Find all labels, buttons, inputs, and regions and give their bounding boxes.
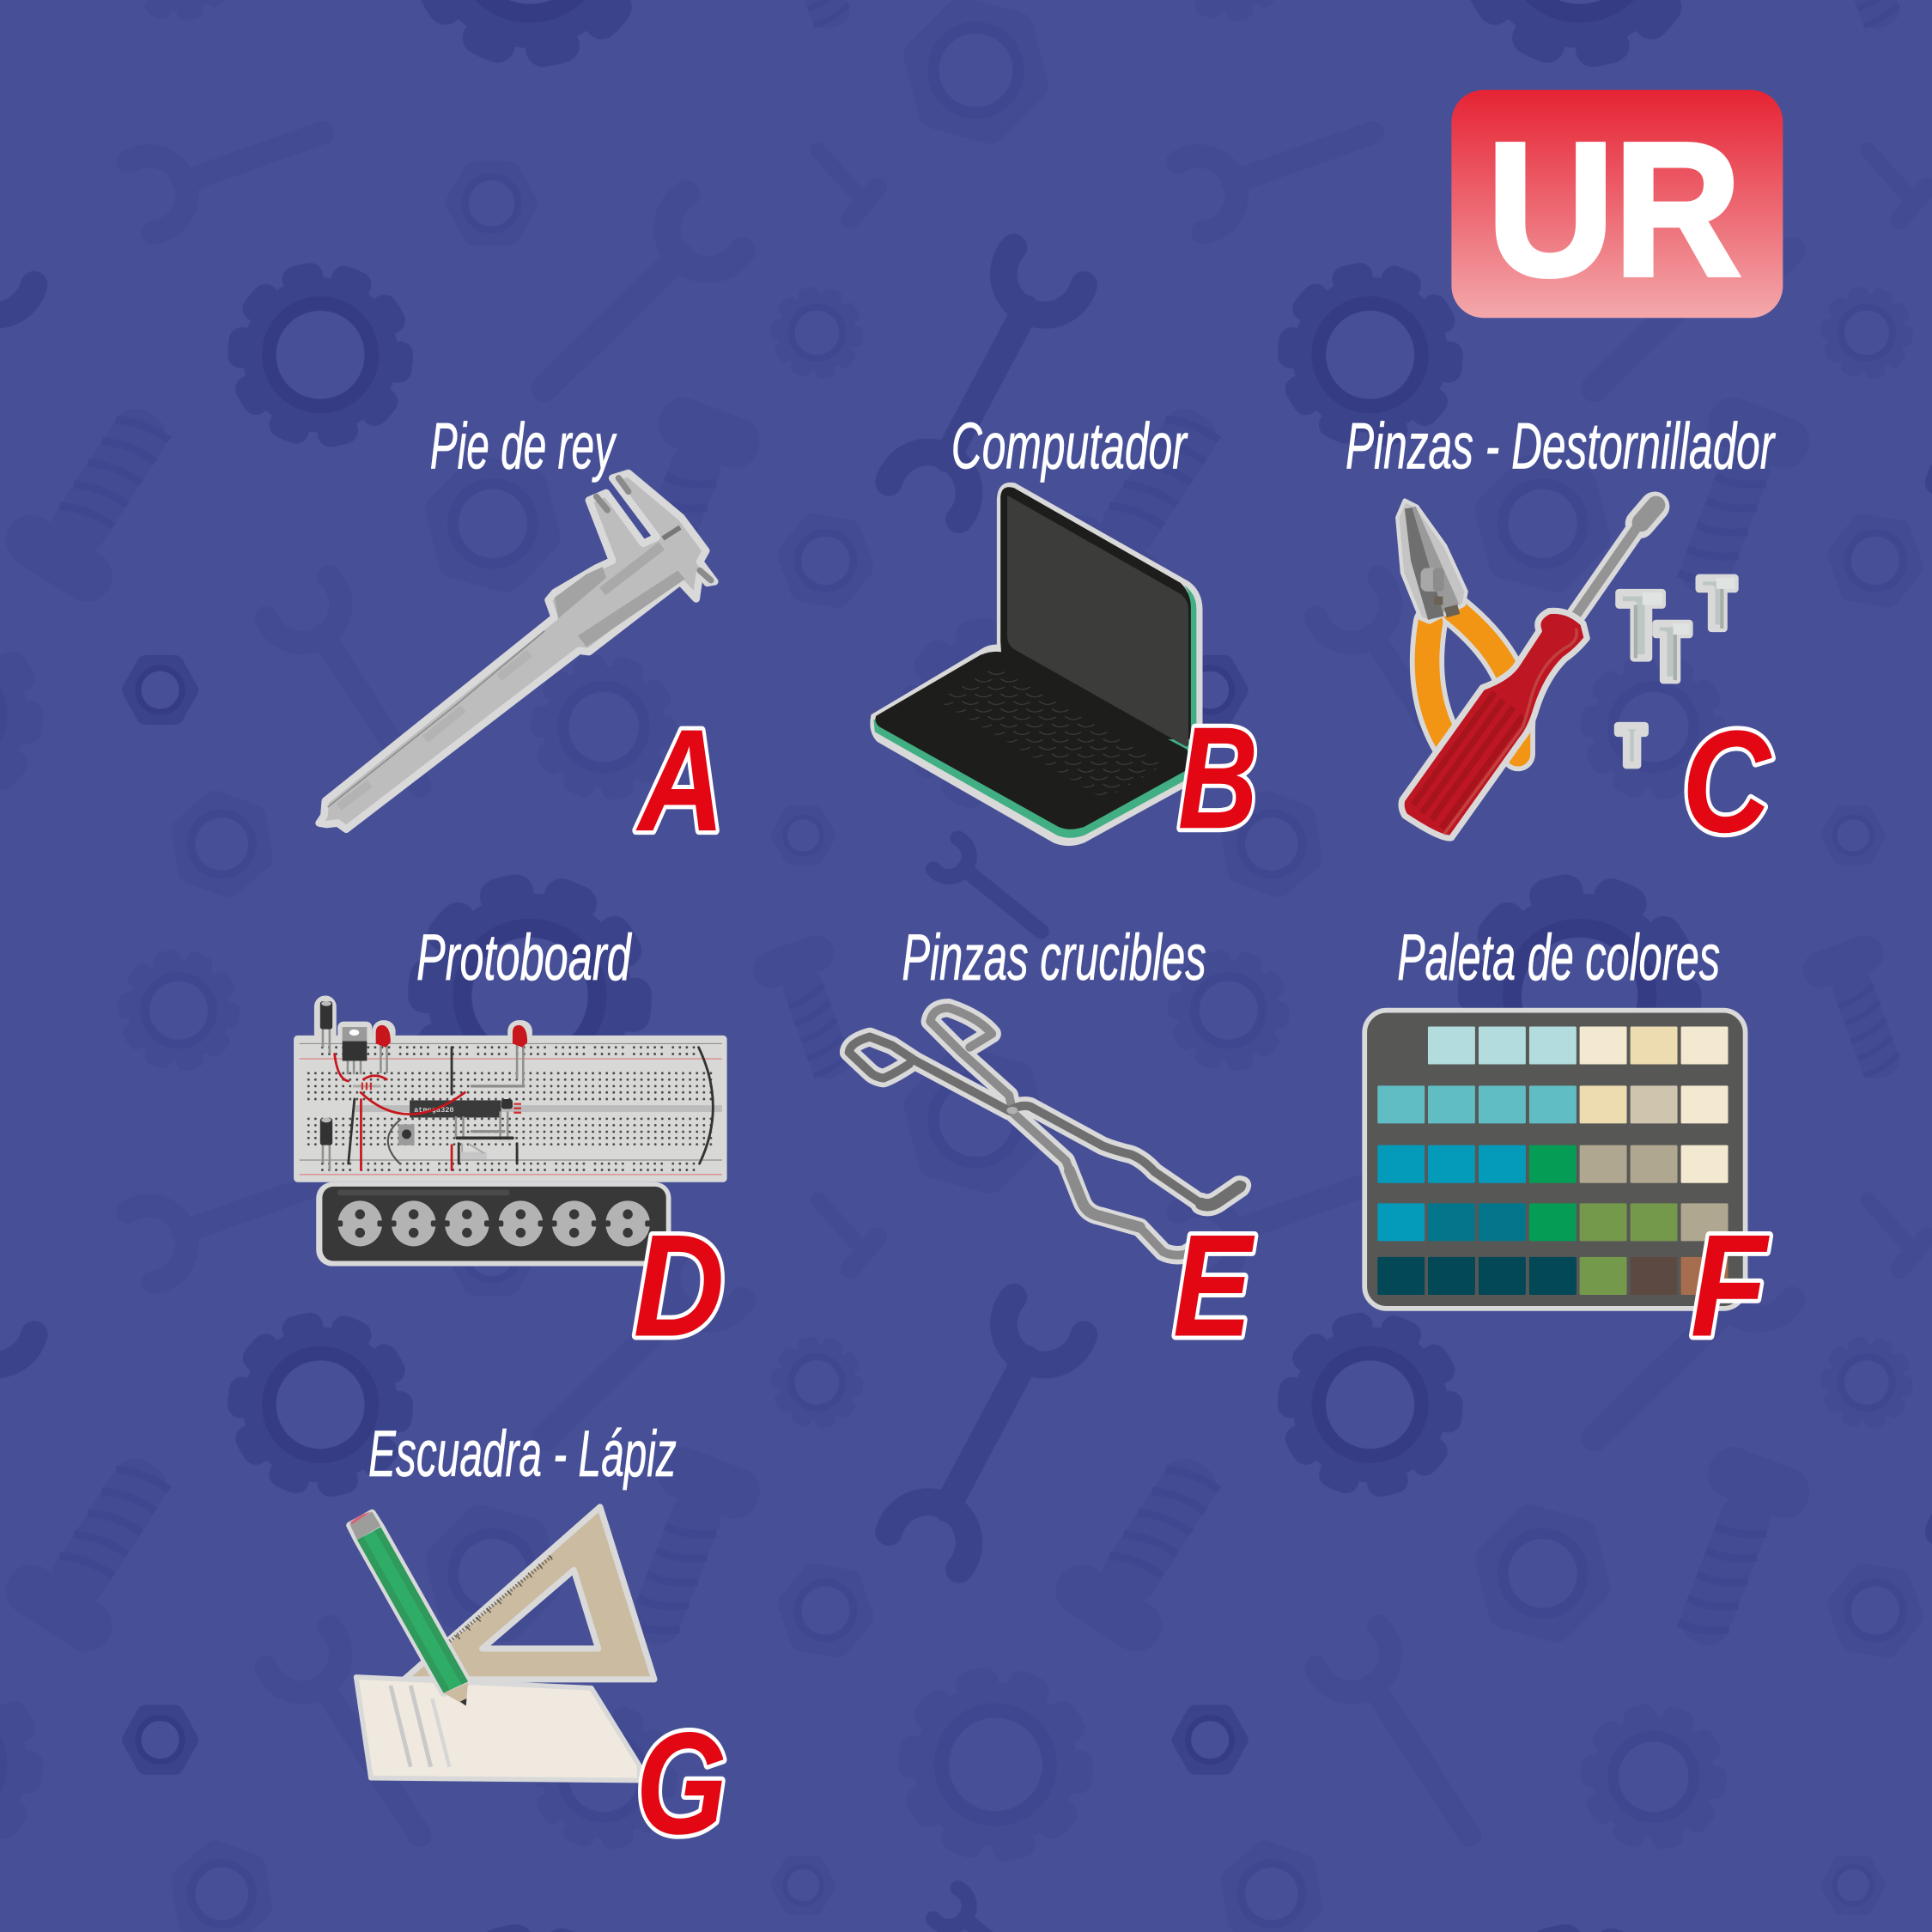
panel C: pinzas y destornillador bbox=[1346, 410, 1776, 863]
icon: breadboard bbox=[294, 995, 727, 1182]
panel G: escuadra y lapiz bbox=[349, 1418, 727, 1864]
icon: colour palette bbox=[1364, 1011, 1746, 1309]
heading A: Pie de rey bbox=[430, 410, 617, 483]
panel A: pie de rey bbox=[319, 410, 725, 861]
icon: laptop bbox=[870, 483, 1203, 846]
panel E: pinzas crucibles bbox=[849, 921, 1255, 1366]
heading E: Pinzas crucibles bbox=[902, 921, 1206, 994]
panel B: computador bbox=[870, 410, 1258, 859]
heading B: Computador bbox=[951, 410, 1188, 483]
heading G: Escuadra - Lápiz bbox=[368, 1418, 677, 1491]
component halos bbox=[314, 995, 532, 1046]
letter E: E bbox=[1173, 1204, 1255, 1366]
heading D: Protoboard bbox=[416, 921, 632, 994]
letter G: G bbox=[635, 1702, 727, 1864]
heading F: Paleta de colores bbox=[1397, 921, 1720, 994]
letter B: B bbox=[1178, 696, 1258, 859]
letter C: C bbox=[1682, 701, 1772, 863]
icon: pliers bbox=[1397, 501, 1518, 756]
icon: pencil bbox=[349, 1512, 468, 1706]
panel F: paleta de colores bbox=[1364, 921, 1771, 1366]
panel D: protoboard bbox=[294, 921, 727, 1366]
letter D: D bbox=[634, 1204, 725, 1366]
icon: paper bbox=[356, 1677, 640, 1781]
chip atmega bbox=[410, 1100, 501, 1117]
chip atmega: atmega328 bbox=[414, 1106, 454, 1115]
icon: screws bbox=[1618, 578, 1735, 765]
icon: set square bbox=[404, 1507, 654, 1680]
icon: screwdriver bbox=[1401, 505, 1656, 838]
icon: power strip bbox=[316, 1182, 671, 1267]
icon: crucible tongs bbox=[849, 1008, 1242, 1255]
icon: caliper bbox=[319, 473, 714, 829]
UR badge: UR bbox=[1487, 103, 1741, 315]
letter F: F bbox=[1691, 1204, 1771, 1366]
letter A: A bbox=[635, 699, 725, 861]
